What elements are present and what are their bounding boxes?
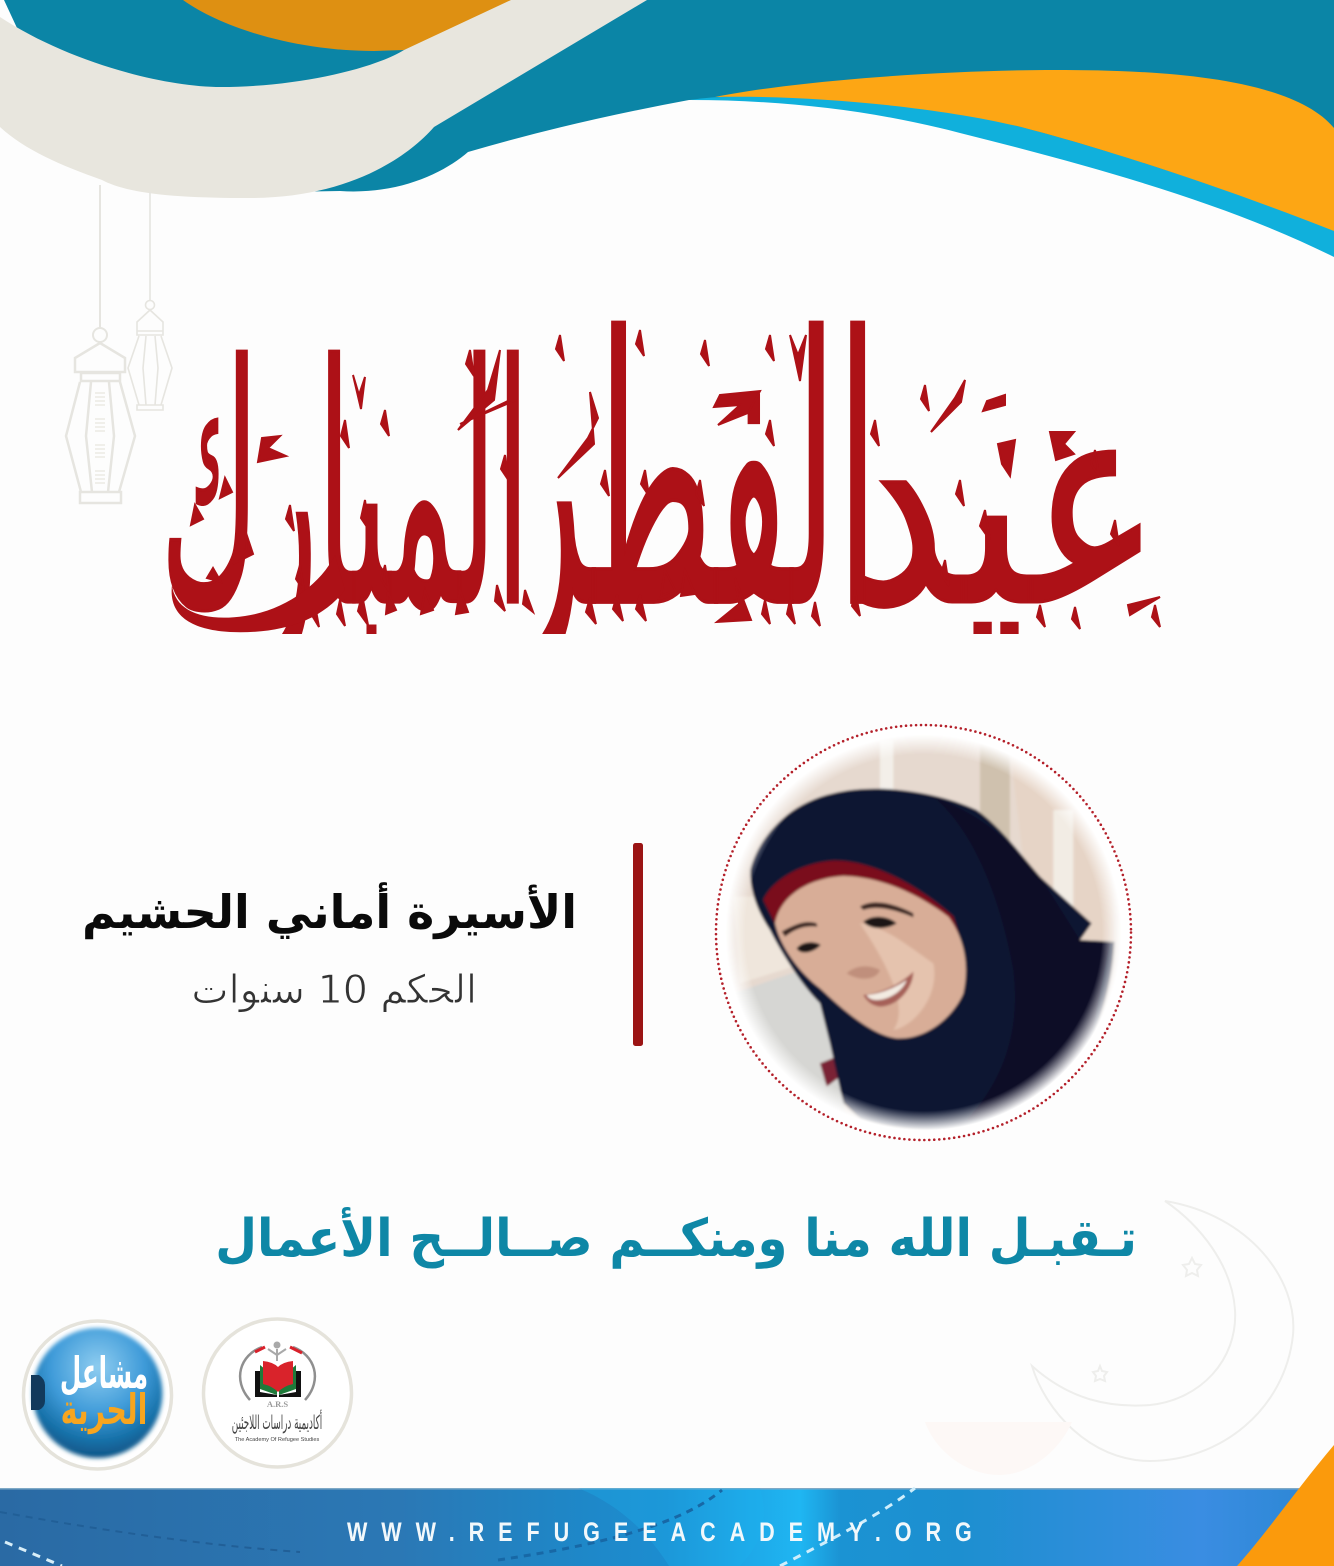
badge title bottom: الحرية — [61, 1387, 147, 1435]
open book — [255, 1371, 301, 1397]
logo: Torches of Freedom badge — [24, 1321, 172, 1469]
top wave: dark orange segment — [183, 0, 520, 51]
calligraphy words — [168, 320, 1141, 634]
sentence line: الحكم 10 سنوات — [191, 967, 477, 1013]
prisoner name: الأسيرة أماني الحشيم — [82, 882, 577, 939]
dotted ring — [716, 725, 1131, 1140]
footer orange corner — [1237, 1445, 1334, 1566]
top wave: light blue ribbon — [690, 96, 1334, 257]
logo: Academy of Refugee Studies badge — [204, 1319, 352, 1467]
faint pink patch — [925, 1422, 1072, 1475]
word: al-Fitr: الفطر — [505, 261, 878, 694]
footer band — [0, 1488, 1334, 1566]
word: Eid: عيد — [848, 333, 1162, 671]
crescent moon watermark — [1032, 1201, 1293, 1461]
badge English name: The Academy Of Refugee Studies — [235, 1437, 319, 1443]
photo: portrait in dotted circle — [716, 725, 1133, 1140]
calligraphy ornament marks — [191, 330, 1160, 629]
divider bar — [633, 843, 643, 1046]
calligraphy swash: final kaf sweep — [172, 555, 345, 632]
footer website address: WWW.REFUGEEACADEMY.ORG — [347, 1518, 972, 1548]
laurel arcs — [240, 1347, 315, 1400]
badge acronym: A.R.S — [267, 1399, 288, 1409]
portrait — [729, 738, 1118, 1130]
lantern: large — [66, 185, 135, 503]
badge title top: مشاعل — [60, 1349, 148, 1399]
top wave: teal band — [4, 0, 1334, 240]
footer swoosh — [578, 1488, 764, 1566]
greeting line: تـقبـل الله منا ومنكــم صــالــح الأعمال — [215, 1206, 1137, 1269]
badge Arabic name: أكاديمية دراسات اللاجئين — [232, 1410, 322, 1434]
footer dashed lines — [780, 1488, 915, 1566]
top wave: cream swoosh — [0, 0, 647, 198]
lantern: small — [128, 192, 172, 410]
main calligraphy title — [168, 320, 1161, 634]
word: al-Mubarak: المبارك — [161, 296, 529, 683]
top wave: orange ribbon — [715, 70, 1334, 231]
